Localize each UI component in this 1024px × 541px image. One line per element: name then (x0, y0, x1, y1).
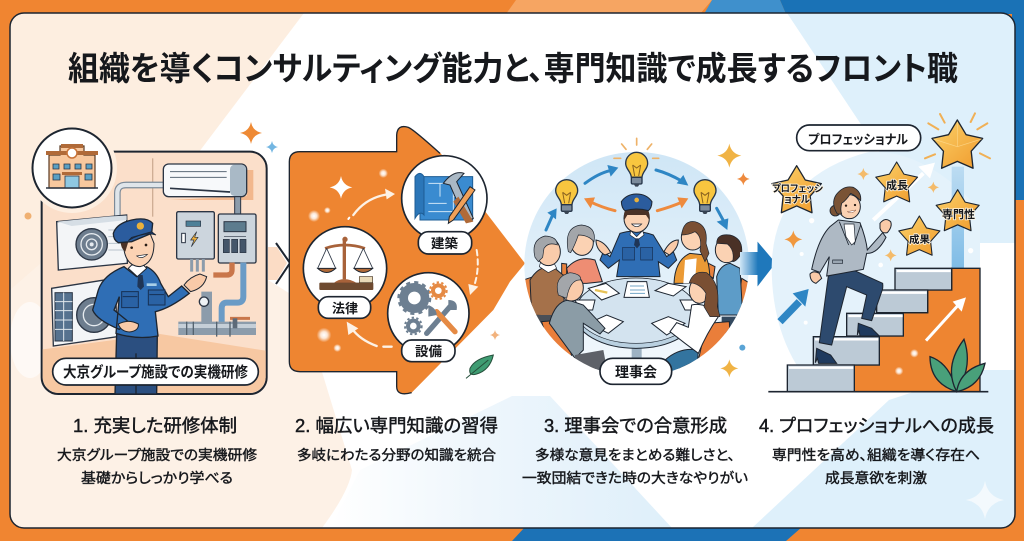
icon: facility building (27, 123, 117, 213)
growth arrow white (873, 163, 935, 220)
star label: expertise: 専門性 (942, 207, 975, 221)
connecting duct (235, 197, 241, 214)
outdoor unit upper (57, 215, 127, 270)
cycle arrows (348, 194, 478, 347)
panel: career growth (768, 113, 990, 392)
stairs orange (854, 268, 980, 392)
step 2 text: 多岐にわたる分野の知識を統合 (297, 447, 496, 463)
step 4 text: 専門性を高め、組織を導く存在へ (772, 447, 980, 463)
leaf and sparkle (466, 330, 500, 378)
woman figure (810, 187, 891, 363)
step 2 text (295, 416, 498, 463)
arrow: step 3 to 4 (740, 243, 775, 285)
step 4 text (759, 416, 994, 486)
star label: professional: ョナル (784, 194, 810, 206)
label: law: 法律 (332, 301, 358, 316)
panel: facility training (42, 152, 267, 394)
orange arrow shape (289, 127, 525, 394)
documents on table (575, 282, 700, 335)
panel: knowledge arrow (289, 127, 525, 394)
front-right woman (665, 272, 730, 377)
indoor air conditioner (163, 164, 253, 200)
step 2 text: 2. 幅広い専門知識の習得 (295, 416, 498, 436)
ground (768, 389, 988, 394)
stairs gray (787, 268, 952, 392)
electrical panels (177, 212, 256, 272)
outdoor unit lower (52, 278, 117, 346)
left older man (530, 236, 565, 327)
star label: professional: プロフェッシ (772, 183, 823, 195)
arrow heads (547, 165, 728, 230)
meeting circle (524, 152, 749, 377)
big star (925, 113, 990, 168)
rising bar (952, 167, 964, 268)
orange chevron tail (520, 258, 524, 269)
pill: professional (797, 125, 921, 151)
pill: equipment (402, 340, 455, 362)
step 1 text (57, 416, 257, 486)
light bulb top (614, 138, 659, 187)
panel: board meeting (520, 138, 750, 384)
arrow: step 1 to 2 (268, 243, 290, 284)
step 4 text: 4. プロフェッショナルへの成長 (759, 416, 994, 436)
circle: law (303, 227, 387, 310)
label: site training: 大京グループ施設での実機研修 (63, 363, 248, 381)
panel frame (42, 152, 267, 394)
star label: professional (772, 183, 823, 206)
label pill (53, 358, 258, 385)
floor (43, 334, 266, 393)
pill: law (318, 297, 371, 318)
label: architecture: 建築 (431, 236, 458, 251)
plant (930, 339, 985, 392)
step 3 text (522, 416, 748, 486)
worker figure (93, 219, 207, 394)
step 3 text: 一致団結できた時の大きなやりがい (522, 470, 748, 486)
people clipped group (523, 221, 750, 377)
step 3 text: 多様な意見をまとめる難しさと、 (535, 447, 735, 463)
sparkles (717, 144, 750, 377)
star label: results: 成果 (909, 233, 930, 246)
light bulb left (556, 180, 578, 214)
sparkle decorations panel 1 (24, 122, 278, 220)
plumbing (178, 263, 256, 337)
idea arrows (546, 170, 724, 230)
title: 組織を導くコンサルティング能力と、専門知識で成長するフロント職 (68, 50, 958, 87)
step 4 text: 成長意欲を刺激 (825, 470, 927, 486)
sparkles (784, 168, 973, 325)
blue arrow (780, 289, 809, 322)
step 1 text: 基礎からしっかり学べる (81, 470, 233, 486)
right man blue sweater (715, 235, 743, 333)
front-left man (542, 273, 608, 377)
star label: growth: 成長 (886, 178, 908, 192)
center presenter (596, 194, 678, 277)
refrigerant pipe (117, 185, 165, 220)
table (578, 278, 692, 358)
stars (772, 162, 979, 255)
label: professional pill: プロフェッショナル (808, 132, 908, 147)
step 1 text: 1. 充実した研修体制 (73, 416, 237, 436)
pill: board (600, 358, 672, 384)
label: board: 理事会 (615, 364, 657, 380)
arrow on stairs (895, 297, 966, 375)
background circle (772, 152, 980, 392)
label: equipment: 設備 (415, 344, 442, 359)
light bulb right (694, 180, 716, 214)
right woman orange jacket (674, 221, 710, 283)
chairs (523, 263, 750, 318)
glow sparkles (308, 169, 388, 352)
circle: architecture (402, 156, 487, 241)
step 3 text: 3. 理事会での合意形成 (544, 416, 727, 436)
circle: equipment (388, 273, 469, 354)
step 1 text: 大京グループ施設での実機研修 (57, 447, 257, 463)
stair highlights (789, 271, 951, 368)
older woman (567, 225, 602, 283)
pill: architecture (418, 232, 472, 254)
